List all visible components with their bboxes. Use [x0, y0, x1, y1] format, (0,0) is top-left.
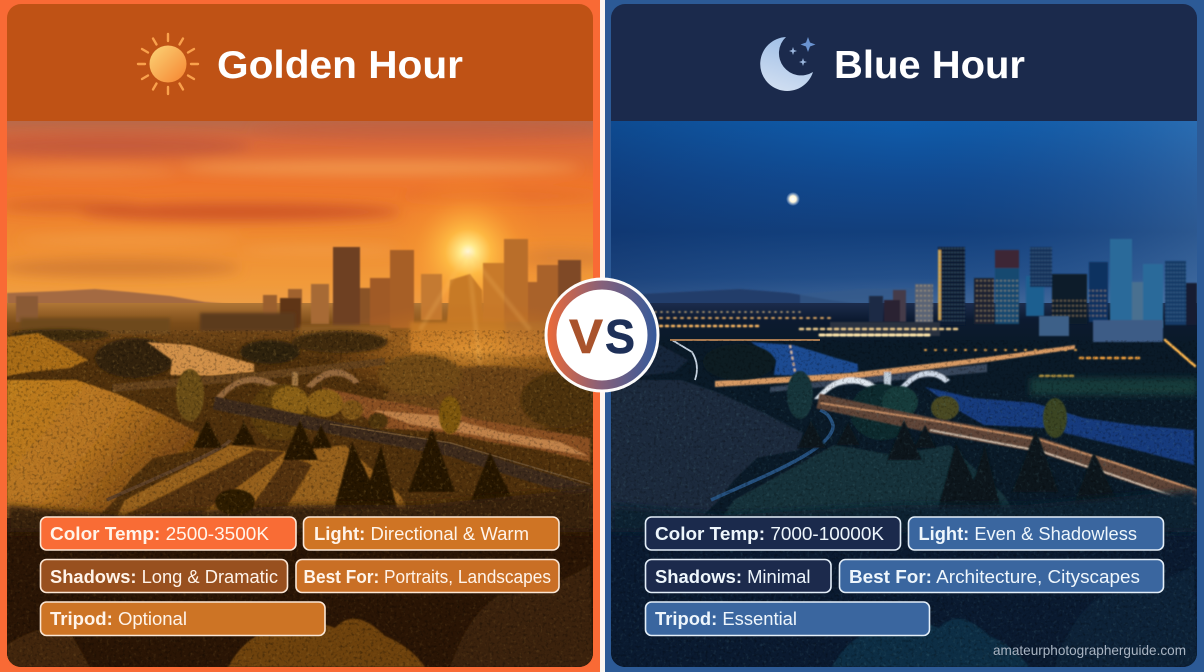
- upper hill: [7, 333, 88, 376]
- photo: golden hour city sunset: [0, 121, 625, 667]
- sky: [611, 121, 1197, 311]
- centre divider: [600, 0, 605, 672]
- low-rise city base: [20, 313, 593, 356]
- texture overlays: [611, 390, 1197, 667]
- trees by river: [703, 344, 1067, 440]
- far vegetation: [10, 329, 600, 434]
- chip: color temp: Color Temp: 7000-10000K: [655, 524, 884, 544]
- light-trail road: [818, 401, 1196, 497]
- chip: shadows: Shadows: Long & Dramatic: [50, 567, 278, 587]
- chip: best for: [840, 560, 1164, 592]
- chip: color temp: Color Temp: 2500-3500K: [50, 524, 269, 544]
- midground ground base: [7, 303, 593, 667]
- title: Blue Hour: Blue Hour: [834, 44, 1025, 87]
- foreground trees: [611, 518, 1197, 667]
- chip: tripod: Tripod: Optional: [50, 609, 187, 629]
- VS badge: [544, 278, 660, 392]
- background: blue side: [605, 0, 1204, 672]
- chip: shadows: [646, 560, 831, 592]
- city lights: [655, 312, 1195, 388]
- sun glow: [422, 191, 514, 288]
- river: [147, 342, 590, 462]
- title: Golden Hour: Golden Hour: [217, 44, 463, 87]
- skyline: [869, 239, 1197, 328]
- sun beams: [420, 251, 530, 366]
- panel: golden hour: [0, 4, 625, 667]
- bridge: [715, 345, 1075, 399]
- chip: best for: Best For: Architecture, Cityscapes: [849, 567, 1140, 587]
- texture overlays: [7, 330, 593, 520]
- chip: tripod: [646, 602, 930, 636]
- chip: light: Light: Even & Shadowless: [918, 524, 1137, 544]
- chip: tripod: [40, 602, 325, 636]
- distant mountains: [642, 288, 848, 303]
- chip: light: [304, 517, 559, 550]
- dark conifers: [193, 420, 520, 515]
- chip: color temp: [40, 517, 296, 550]
- winding path: [711, 410, 833, 500]
- overpass: [670, 339, 820, 341]
- midground ground base: [611, 303, 1197, 667]
- chip: tripod: Tripod: Essential: [655, 609, 797, 629]
- bridge: [112, 358, 385, 399]
- chip: best for: [296, 560, 559, 592]
- VS badge: S: [605, 311, 635, 364]
- chips: blue hour facts: [646, 517, 1164, 636]
- chip: light: [908, 517, 1164, 550]
- chips: golden hour facts: [40, 517, 559, 636]
- winding path: [107, 440, 230, 500]
- VS badge: V: [569, 311, 603, 364]
- moon in sky: [786, 192, 800, 206]
- lower buildings lit: [830, 316, 1163, 342]
- green park: [1030, 378, 1197, 395]
- river: [751, 342, 1194, 465]
- watermark: amateurphotographerguide.com: [993, 642, 1186, 658]
- background: orange side: [0, 0, 600, 672]
- icon: crescent moon with stars: [760, 37, 816, 91]
- golden hill: [7, 380, 199, 525]
- upper hill and ramp: [643, 345, 688, 376]
- header bar: blue hour: [611, 4, 1197, 121]
- central tree cluster: [176, 369, 461, 440]
- panel: blue hour: [611, 4, 1197, 667]
- road: [214, 403, 590, 493]
- long shadows: [125, 450, 312, 522]
- sky side light: [611, 121, 1197, 311]
- chip: shadows: Shadows: Minimal: [655, 567, 810, 587]
- sky: [7, 121, 593, 311]
- lawn: [714, 445, 1024, 530]
- icon: sun: [138, 34, 198, 94]
- clouds: [7, 136, 593, 280]
- warm glow below sun: [336, 312, 559, 387]
- dark conifers: [797, 420, 1124, 515]
- chip: best for: Best For: Portraits, Landscapes: [304, 567, 551, 587]
- foreground trees: [7, 518, 593, 667]
- chip: light: Light: Directional & Warm: [314, 524, 529, 544]
- skyline: [16, 238, 582, 328]
- chip: color temp: [646, 517, 900, 550]
- header bar: golden hour: [7, 4, 593, 121]
- chip: shadows: [40, 560, 288, 592]
- hill: [611, 380, 803, 525]
- distant mountains: [7, 288, 224, 303]
- grass field: [116, 444, 407, 516]
- photo: blue hour city dusk: [611, 121, 1197, 667]
